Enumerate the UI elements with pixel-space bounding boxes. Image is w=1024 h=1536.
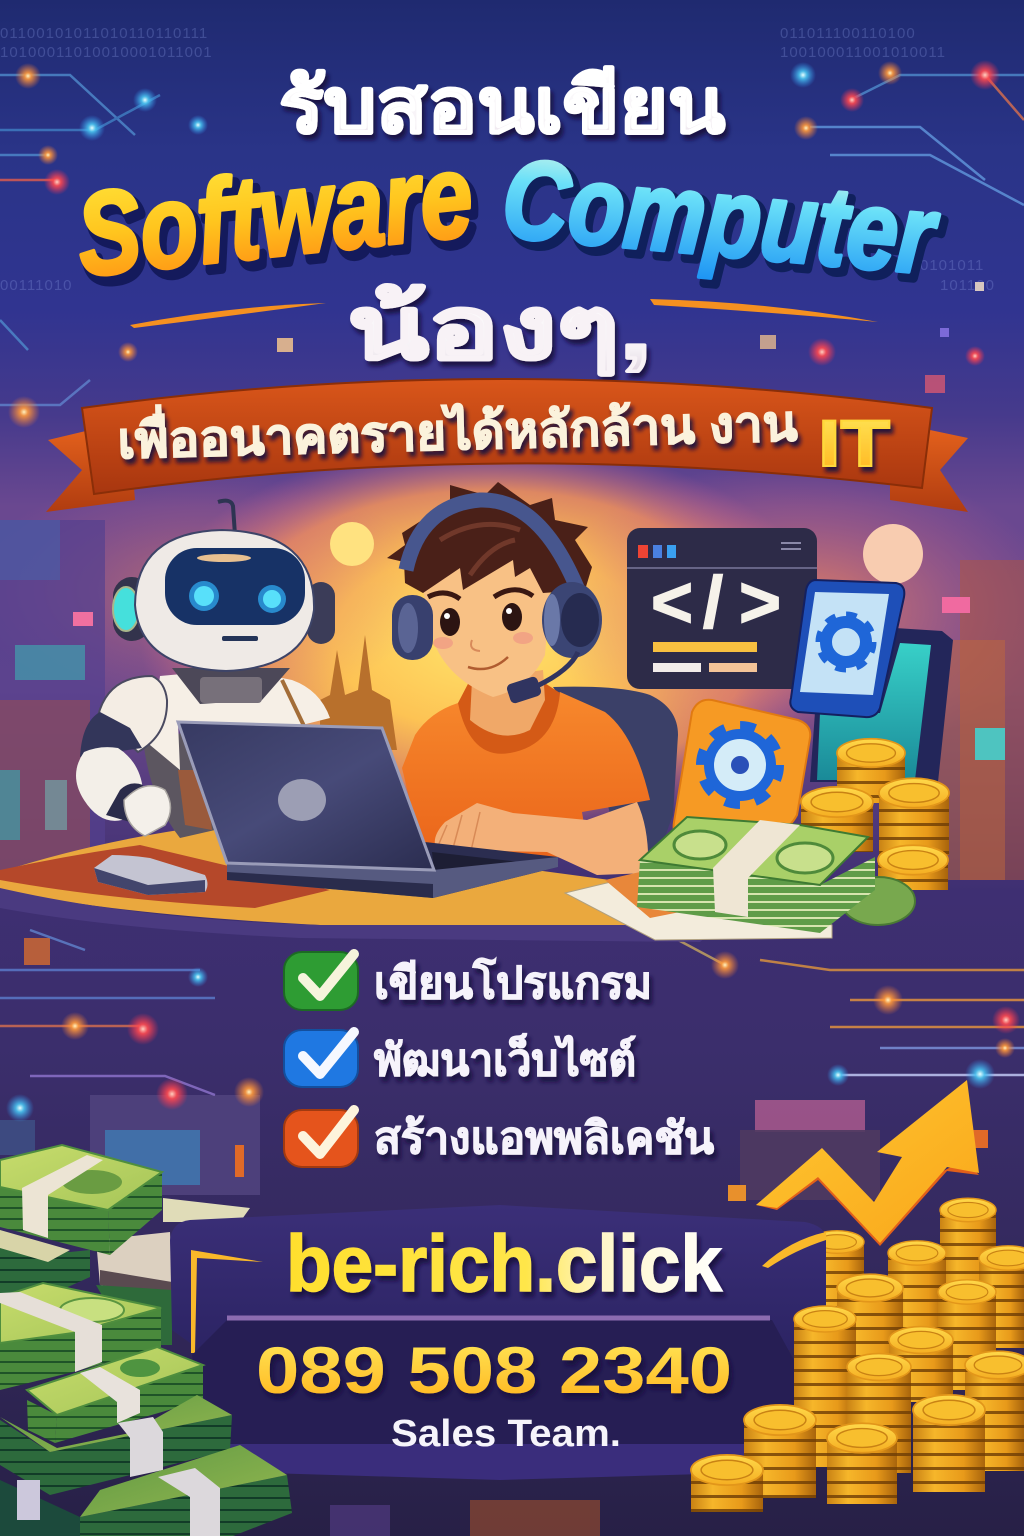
gear icon xyxy=(701,726,779,804)
tablet xyxy=(810,628,953,782)
large money pile xyxy=(0,1145,292,1536)
laptop xyxy=(178,722,558,898)
background binary code: 10100011010010001011001 xyxy=(0,44,213,61)
word: Software: Software xyxy=(76,136,484,309)
title line 3: Thai subtitle with swooshes xyxy=(130,281,878,377)
sales team: Sales Team. xyxy=(391,1413,621,1455)
website: be-rich.click xyxy=(286,1219,722,1308)
bundle: top xyxy=(0,1145,162,1255)
robot collar xyxy=(172,668,290,704)
robot ears xyxy=(113,577,151,641)
bundle: bottom xyxy=(0,1445,292,1536)
item: write programs: เขียนโปรแกรม xyxy=(374,956,652,1008)
checklist xyxy=(284,952,714,1167)
bundle: lower xyxy=(27,1347,203,1443)
bundle: middle xyxy=(0,1283,161,1390)
phone number: 089 508 2340 xyxy=(256,1333,732,1407)
title line 2: Software Computer xyxy=(71,129,949,309)
background glowing lights xyxy=(6,60,1020,1122)
boy face xyxy=(423,530,550,697)
partly hidden coin stack xyxy=(810,1231,864,1306)
item: develop websites xyxy=(284,1030,636,1087)
growth arrow xyxy=(756,1080,979,1246)
background binary code: 00111010 xyxy=(0,277,73,294)
item: build applications: สร้างแอพพลิเคชัน xyxy=(374,1114,714,1163)
background city skyline xyxy=(0,520,1024,1536)
robot xyxy=(76,501,335,838)
item: build applications xyxy=(284,1110,714,1167)
background binary code: 011011100110100 xyxy=(780,25,916,42)
background binary code: 100100011001010011 xyxy=(780,44,946,61)
phone panel xyxy=(192,1320,802,1444)
robot chest xyxy=(150,673,330,770)
boy collar and neck xyxy=(458,680,560,754)
green coin xyxy=(841,877,915,925)
boy hair xyxy=(387,482,592,593)
code window xyxy=(627,528,817,689)
boy with headset xyxy=(387,482,650,875)
gear icon xyxy=(820,616,872,668)
robot arm xyxy=(76,676,170,836)
ribbon text: IT xyxy=(818,406,890,480)
chair xyxy=(553,687,678,850)
computer mouse xyxy=(94,855,208,895)
desk xyxy=(0,826,720,942)
lower band xyxy=(197,1420,800,1480)
background binary code: 0101011 xyxy=(920,257,984,274)
robot abdomen xyxy=(143,730,215,838)
headset xyxy=(392,500,602,704)
boy torso xyxy=(402,692,650,860)
contact panel xyxy=(170,1205,826,1480)
background circuit lines xyxy=(0,75,1024,1095)
pale bills behind panel xyxy=(96,1198,250,1345)
bundle: rear left xyxy=(0,1230,90,1296)
gold accents xyxy=(191,1250,263,1353)
bundle: base xyxy=(0,1395,232,1495)
word: Software: Software xyxy=(71,129,479,302)
word: Computer: Computer xyxy=(498,135,944,298)
code symbol: </> xyxy=(651,563,781,643)
ribbon text xyxy=(117,388,890,480)
boy arm xyxy=(435,802,648,875)
item: write programs xyxy=(284,952,652,1010)
coin stacks near desk xyxy=(801,739,949,890)
robot head xyxy=(135,530,314,671)
cash stack on desk xyxy=(565,817,915,940)
background binary code xyxy=(0,25,995,294)
title line 3: Thai subtitle with swooshes: น้องๆ, xyxy=(348,281,652,377)
website panel xyxy=(170,1205,826,1350)
title line 1: Thai heading: รับสอนเขียน xyxy=(279,64,725,149)
paper bills xyxy=(565,875,832,940)
robot antenna xyxy=(218,501,235,535)
large coin stacks xyxy=(691,1198,1024,1512)
robot visor xyxy=(165,548,305,625)
background binary code: 01100101011010110110111 xyxy=(0,25,208,42)
background binary code: 101100 xyxy=(940,277,995,294)
ribbon banner xyxy=(46,379,968,512)
ribbon text: เพื่ออนาคตรายได้หลักล้าน งาน xyxy=(117,388,798,469)
phone with gear xyxy=(790,580,904,717)
item: develop websites: พัฒนาเว็บไซต์ xyxy=(374,1033,636,1085)
orange gear tile xyxy=(674,700,810,835)
